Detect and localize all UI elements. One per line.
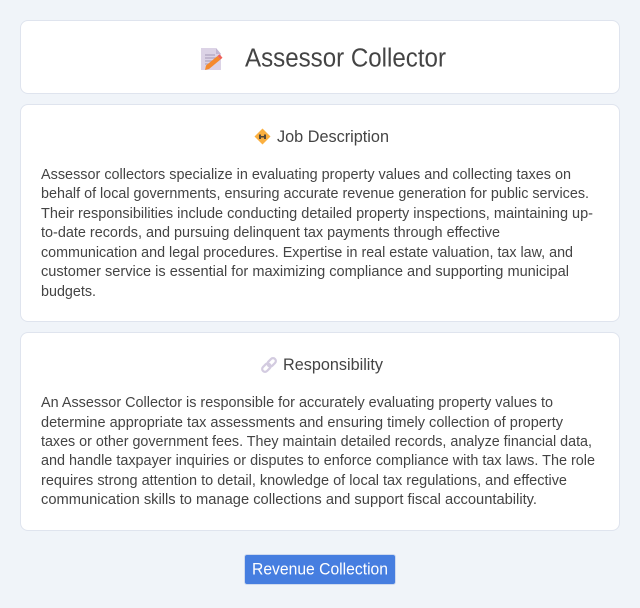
text block: responsibility: An Assessor Collector is responsible for accurately evaluating property values to (41, 395, 553, 411)
text block: responsibility: taxes or other government fees. They maintain detailed records, analyze financial data, (41, 434, 592, 450)
text block: job description: Assessor collectors specialize in evaluating property values and collecting taxes on (41, 167, 571, 183)
text block: responsibility: determine appropriate tax assessments and ensuring timely collection of property (41, 415, 564, 431)
text block: responsibility (41, 395, 595, 508)
button: revenue collection (244, 554, 396, 585)
text block: job description: budgets. (41, 284, 96, 300)
text block: responsibility: and handle taxpayer inquiries or disputes to enforce compliance with tax laws. The role (41, 453, 595, 469)
text block: responsibility: communication skills to manage collections and support fiscal accountability. (41, 492, 537, 508)
panel: title card (20, 20, 620, 94)
text block: job description: behalf of local governments, ensuring accurate revenue generation for public services. (41, 186, 589, 202)
icon: orange diamond sign (254, 128, 270, 144)
panel: responsibility (20, 332, 620, 531)
text block: responsibility: requires strong attention to detail, knowledge of local tax regulations, and effective (41, 473, 567, 489)
text block: job description (41, 167, 593, 300)
text block: job description: Their responsibilities include conducting detailed property inspections, maintaining up- (41, 206, 593, 222)
icon: document with pencil (201, 48, 222, 70)
text block: job description: communication and legal procedures. Expertise in real estate valuation, tax law, and (41, 245, 573, 261)
text block: job description: customer service is essential for maximizing compliance and supporting municipal (41, 264, 569, 280)
heading: responsibility: Responsibility (283, 356, 384, 374)
title: Assessor Collector (245, 44, 446, 72)
panel: job description (20, 104, 620, 322)
button: revenue collection: Revenue Collection (252, 560, 388, 578)
heading: job description: Job Description (277, 128, 389, 146)
text block: job description: to-date records, and pursuing delinquent tax payments through effective (41, 225, 500, 241)
icon: chain link (261, 357, 277, 373)
